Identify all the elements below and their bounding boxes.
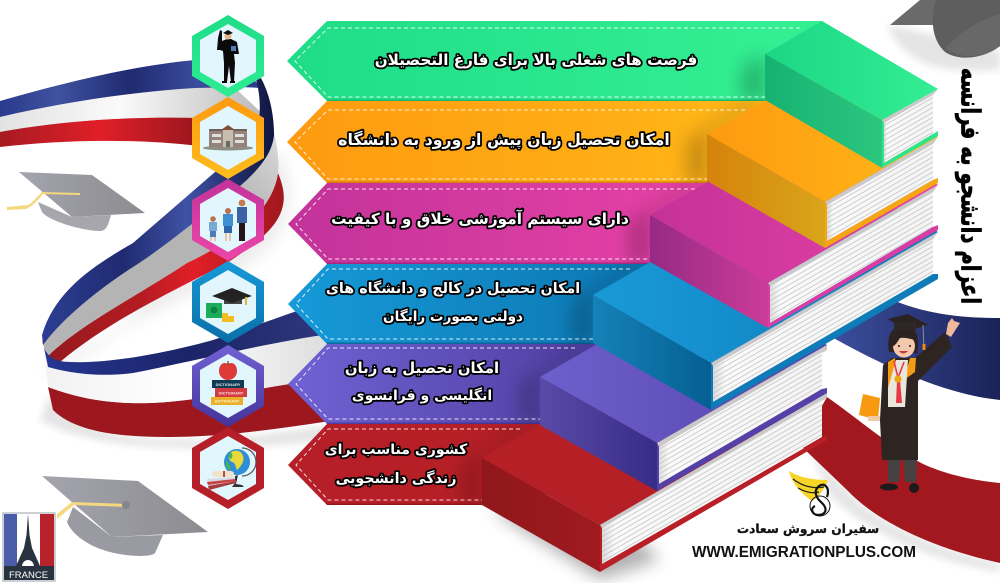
hexagon icon: globe and books [192,427,264,509]
banner: blue [288,264,656,344]
ribbon: right band [800,301,1000,572]
medal and tie [894,361,904,403]
book: orange [707,69,938,248]
shirt [888,360,908,407]
banner: blue: دولتی بصورت رایگان [383,308,523,325]
icon: eiffel tower [16,514,40,566]
icon: dictionaries: DICTIONARY [216,382,241,387]
icon: students [209,200,247,241]
france badge [3,513,55,581]
heading text: blue banner: امکان تحصیل در کالج و دانشگاه های [326,280,580,297]
icon: graduate figure [217,30,239,83]
icon: dictionaries [211,361,247,405]
banner: purple: انگلیسی و فرانسوی [352,387,492,404]
page title: اعزام دانشجو به فرانسه [955,68,985,304]
badge label: FRANCE [9,570,48,581]
heading text: green banner: فرصت های شغلی بالا برای فارغ التحصیلان [375,51,697,69]
graduation cap: lower left [42,476,208,556]
hexagon icon: cap and money [192,261,264,343]
graduation cap: upper left [7,172,145,231]
head [888,326,918,358]
banner: orange [287,101,772,183]
ribbon: lower band [40,310,330,448]
website url: WWW.EMIGRATIONPLUS.COM [692,544,916,561]
hexagon icon: school building [192,97,264,179]
gown [880,332,952,460]
book: purple [540,279,827,491]
banner: purple [288,344,600,424]
book: magenta [650,117,938,328]
icon: mortarboard, cash, coins [206,288,252,322]
icon: dictionaries: DICTIONARY [219,390,244,396]
ribbon: upper left band [0,60,267,147]
banner: red: زندگی دانشجویی [336,470,456,487]
mortarboard [888,314,928,350]
raised hand [946,318,960,337]
graduation cap: top right [888,0,1000,71]
book: blue [593,164,938,410]
ribbon: diagonal twist [42,78,290,375]
banner: red [288,424,545,505]
icon: dictionaries: DICTIONARY [215,398,240,404]
orange stole [888,358,916,388]
illustration: student in gown [859,314,960,493]
icon: building [203,125,253,150]
book: red [482,326,827,572]
book stack [482,21,938,580]
banner: green [287,21,822,101]
folder [859,394,880,420]
logo text: سفیران سروش سعادت [737,522,879,536]
hexagon icon: graduate [192,15,264,97]
heading text: magenta banner: دارای سیستم آموزشی خلاق و با کیفیت [331,209,629,228]
hexagon icon: apple and dictionaries [192,345,264,427]
heading text: purple banner: امکان تحصیل به زبان [345,359,499,377]
heading text: orange banner: امکان تحصیل زبان پیش از ورود به دانشگاه [338,130,670,150]
book: green [765,21,938,168]
hexagon icon: three students [192,179,264,261]
icon: globe [207,448,256,490]
banner: magenta [288,183,714,264]
logo mark [789,471,830,516]
trousers and shoes [880,407,919,493]
heading text: red banner: کشوری مناسب برای [325,442,468,458]
